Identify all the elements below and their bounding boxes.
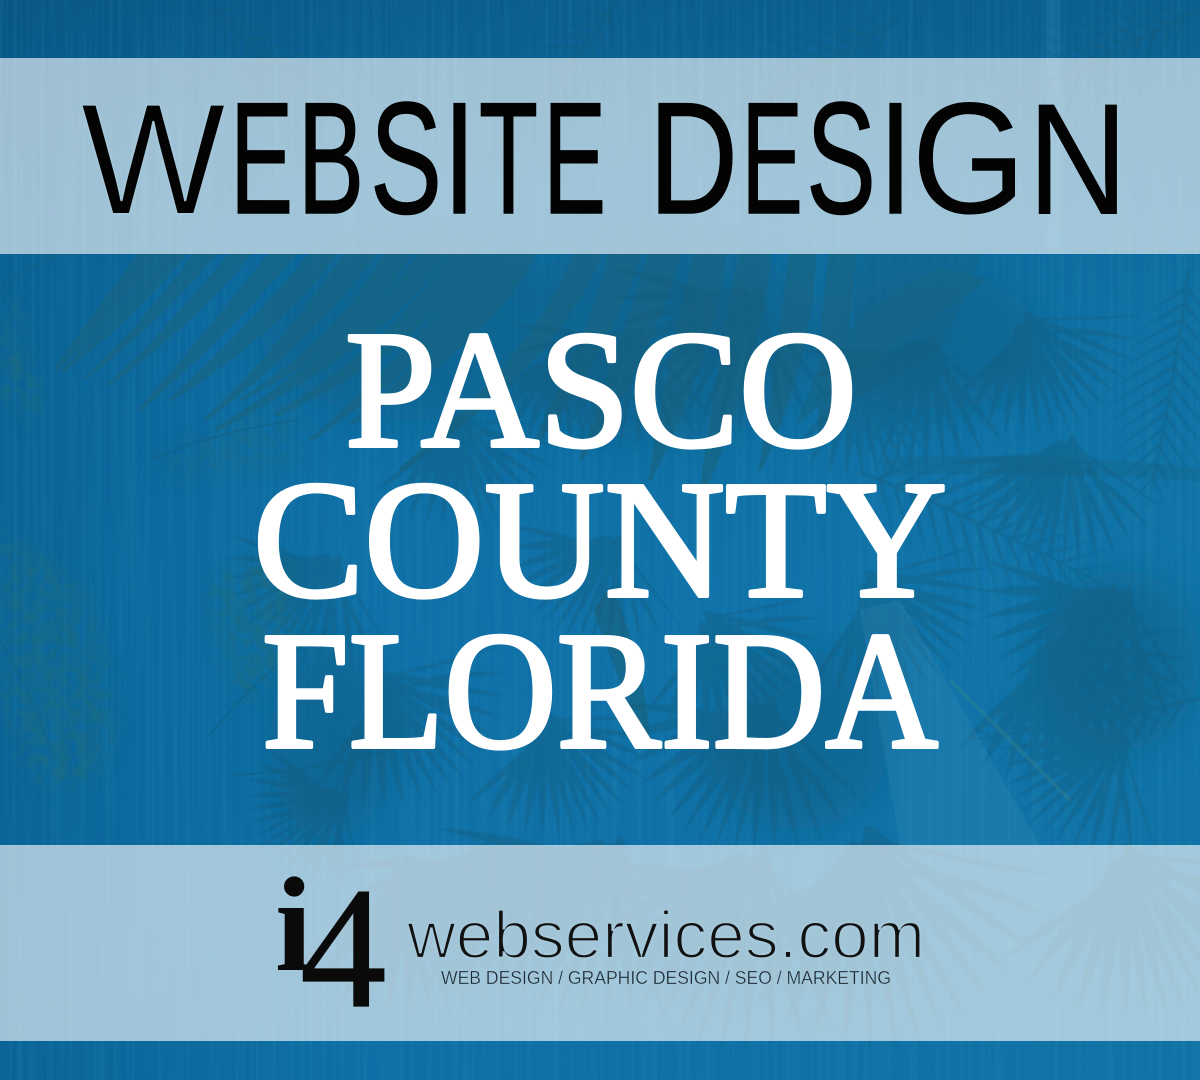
logo wordmark: webservices.com (406, 898, 925, 973)
heading: website design: I (879, 69, 912, 247)
title line: county: COUNTY (253, 447, 947, 633)
heading: website design: I (443, 69, 476, 247)
top band (0, 58, 1200, 254)
heading: website design: E (741, 69, 803, 247)
heading: website design: S (806, 69, 876, 247)
trunk highlight line (950, 680, 1070, 800)
heading: website design: B (298, 69, 364, 247)
bottom band (0, 845, 1200, 1041)
distant tree foliage (0, 295, 300, 791)
heading: website design: D (649, 69, 738, 247)
heading: website design: S (370, 69, 442, 247)
title line: pasco: PASCO (345, 297, 857, 483)
logo mark: 4 (300, 853, 386, 1044)
heading: website design: E (230, 69, 293, 247)
pale trunk (860, 600, 1040, 845)
dark foliage masses (260, 240, 1200, 840)
heading: website design: N (1027, 70, 1128, 248)
heading: website design: T (479, 69, 538, 247)
logo tagline: WEB DESIGN / GRAPHIC DESIGN / SEO / MARKETING (441, 968, 891, 988)
heading: website design: W (81, 70, 226, 248)
logo mark: i (275, 851, 313, 1000)
heading: website design: E (543, 69, 606, 247)
palm fronds (55, 254, 1200, 750)
heading: website design: G (912, 69, 1026, 247)
heading: website design (81, 69, 1128, 248)
thin palm stems (0, 255, 420, 775)
title line: florida: FLORIDA (262, 598, 938, 784)
title: pasco county florida (253, 297, 947, 784)
logo: i4 webservices (275, 851, 925, 1044)
